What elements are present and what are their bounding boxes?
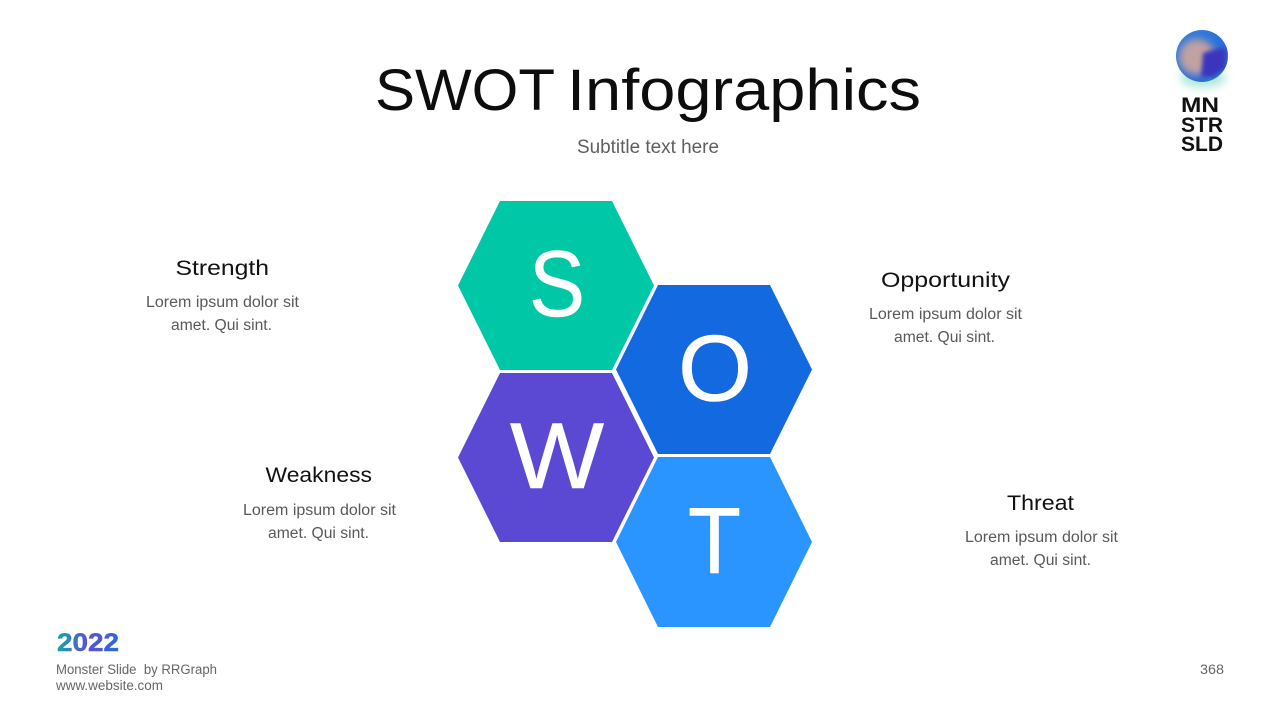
logo wordmark: MN xyxy=(1181,94,1219,117)
footer: credits xyxy=(55,662,217,693)
title: Infographics xyxy=(567,58,921,123)
logo wordmark xyxy=(1181,94,1223,156)
icon: orb glow xyxy=(1180,68,1226,88)
hexagon S xyxy=(458,201,654,370)
hexagon S: S xyxy=(529,231,585,336)
footer: credits: Monster Slide by RRGraph xyxy=(56,662,217,677)
icon: orb xyxy=(1176,30,1228,82)
text block: Threat: amet. Qui sint. xyxy=(990,552,1091,569)
text block: Threat xyxy=(965,492,1119,569)
logo wordmark: STR xyxy=(1181,114,1223,137)
text block: Opportunity: amet. Qui sint. xyxy=(894,329,995,346)
title: SWOT xyxy=(375,58,555,123)
logo wordmark: SLD xyxy=(1181,133,1223,156)
text block: Weakness xyxy=(243,464,397,542)
hexagon O: O xyxy=(678,316,752,420)
text block: Weakness: Lorem ipsum dolor sit xyxy=(243,502,397,519)
text block: Strength: Strength xyxy=(176,257,269,280)
title xyxy=(375,58,921,123)
subtitle: Subtitle text here xyxy=(577,137,719,158)
page number: 368 xyxy=(1200,661,1224,677)
text block: Opportunity xyxy=(869,269,1023,346)
hexagon T: T xyxy=(688,488,741,593)
hexagon O xyxy=(616,285,812,454)
text block: Strength: Lorem ipsum dolor sit xyxy=(146,294,300,311)
text block: Opportunity: Opportunity xyxy=(881,269,1011,292)
SWOT hexagon diagram xyxy=(458,201,812,627)
text block: Weakness: amet. Qui sint. xyxy=(268,525,369,542)
text block: Opportunity: Lorem ipsum dolor sit xyxy=(869,306,1023,323)
text block: Weakness: Weakness xyxy=(266,464,372,487)
hexagon T xyxy=(616,457,812,627)
text block: Strength xyxy=(146,257,300,334)
hexagon W: W xyxy=(510,403,604,508)
text block: Strength: amet. Qui sint. xyxy=(171,317,272,334)
footer: year: 2022 xyxy=(57,629,119,657)
text block: Threat: Lorem ipsum dolor sit xyxy=(965,529,1119,546)
footer: credits: www.website.com xyxy=(55,678,163,693)
logo: orb and wordmark xyxy=(1176,30,1228,156)
text block: Threat: Threat xyxy=(1007,492,1074,515)
hexagon W xyxy=(458,373,654,542)
